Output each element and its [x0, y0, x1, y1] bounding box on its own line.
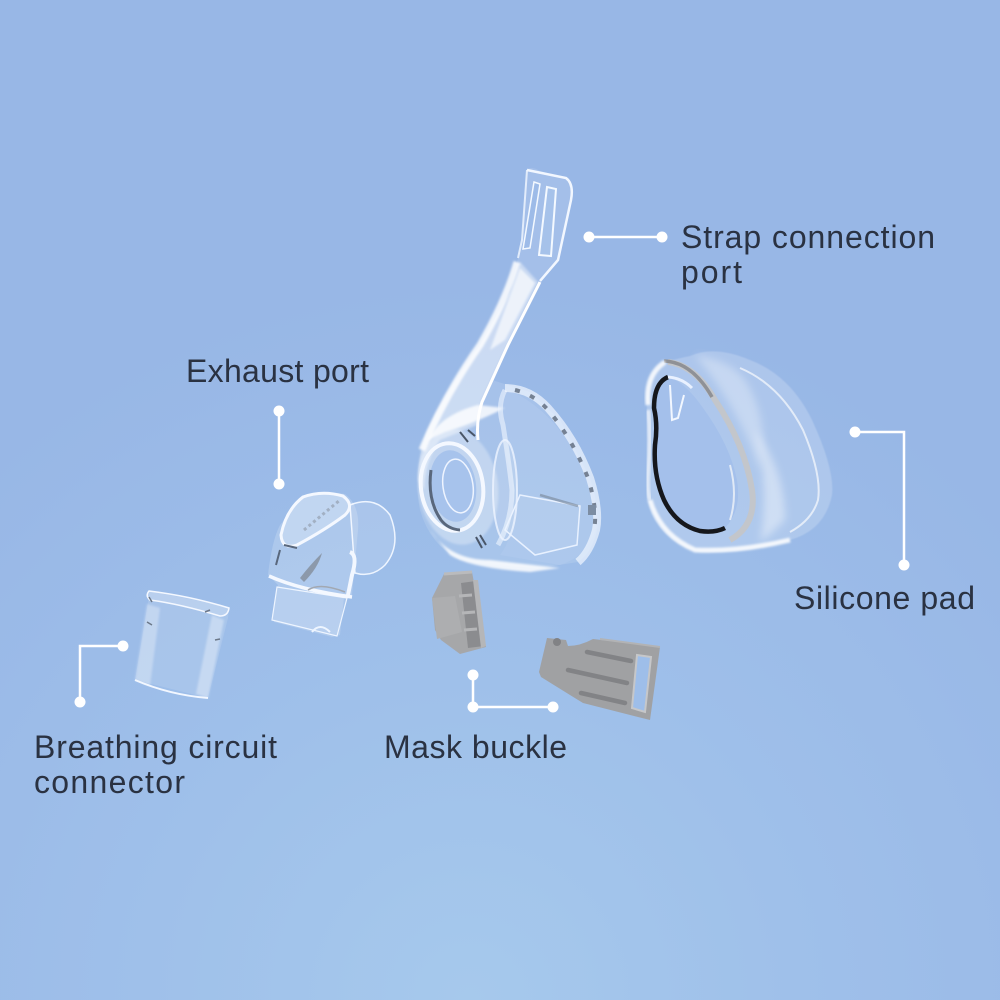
strap slots — [523, 182, 540, 249]
leader: strap connection port — [584, 232, 668, 242]
label: mask buckle: Mask buckle — [384, 729, 567, 765]
connector ring — [410, 424, 506, 550]
leader: silicone pad — [850, 426, 910, 570]
icon: silicone pad — [647, 351, 832, 552]
label: silicone pad: Silicone pad — [794, 580, 975, 616]
leader: breathing circuit connector — [74, 640, 128, 708]
label: breathing circuit connector: Breathing circuit — [34, 729, 277, 765]
rim notches — [505, 388, 597, 562]
leader: exhaust port — [274, 406, 284, 490]
icon: exhaust elbow — [268, 493, 395, 637]
label: breathing circuit connector: connector — [34, 764, 185, 800]
icon: mask frame with strap connection arm — [410, 168, 598, 572]
mask cone — [500, 388, 597, 565]
label: breathing circuit connector — [34, 729, 277, 800]
arm highlights — [422, 262, 517, 450]
label: exhaust port: Exhaust port — [186, 353, 369, 389]
label: strap connection port — [681, 219, 935, 290]
pad inner opening — [654, 377, 738, 532]
inner cone window — [505, 495, 580, 555]
leader: mask buckle — [468, 670, 558, 712]
label: strap connection port: Strap connection — [681, 219, 935, 255]
icon: large mask buckle — [539, 638, 660, 720]
label: strap connection port: port — [681, 254, 742, 290]
icon: small mask buckle — [432, 572, 486, 654]
icon: breathing circuit connector — [135, 591, 229, 698]
